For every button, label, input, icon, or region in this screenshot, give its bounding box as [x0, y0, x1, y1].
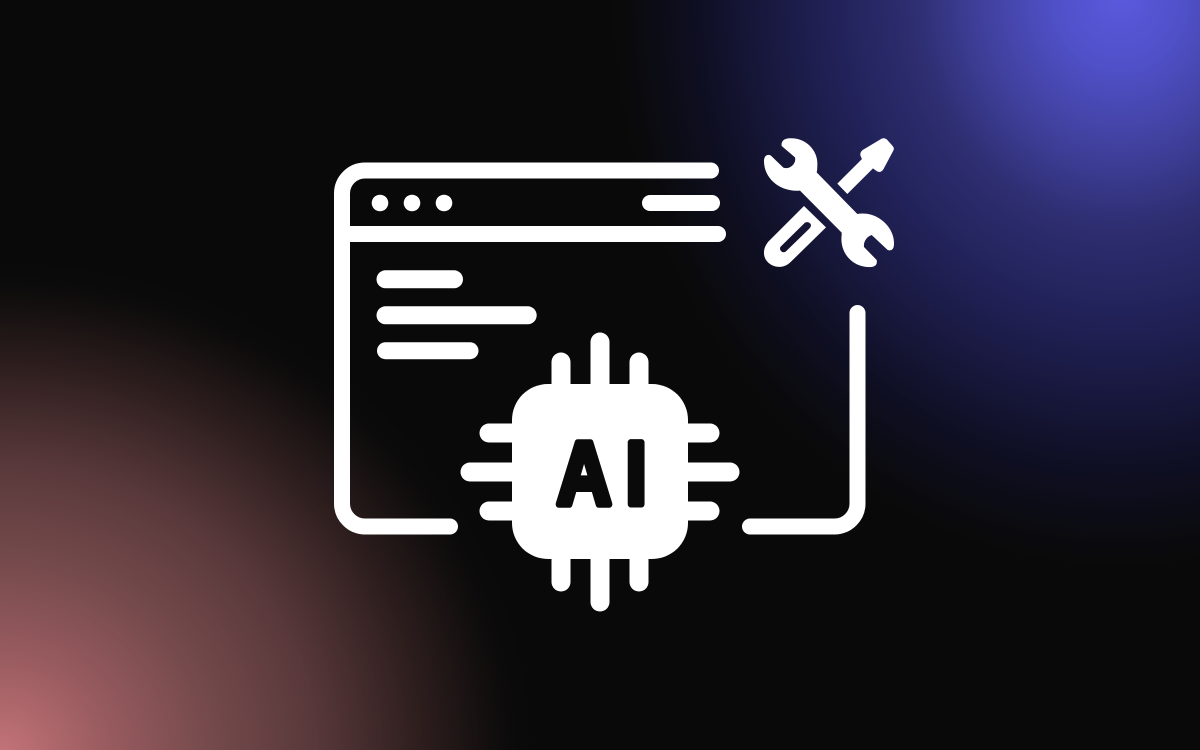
- icon: browser window: [342, 170, 858, 526]
- screwdriver handle: [764, 206, 826, 267]
- chip label: A: [557, 423, 611, 523]
- title bar menu line: [650, 195, 712, 211]
- chip label: I: [626, 423, 647, 523]
- window frame left part: [342, 170, 711, 526]
- chip pins: [470, 342, 730, 602]
- icon: wrench and screwdriver: [764, 138, 894, 267]
- chip body: [512, 384, 688, 559]
- screwdriver blade: [837, 138, 894, 194]
- icon: AI chip: [470, 342, 730, 602]
- code lines: [386, 279, 528, 351]
- title bar divider: [342, 226, 718, 242]
- wrench: [764, 138, 894, 267]
- window frame right part: [750, 313, 858, 526]
- window control dots: [372, 195, 452, 211]
